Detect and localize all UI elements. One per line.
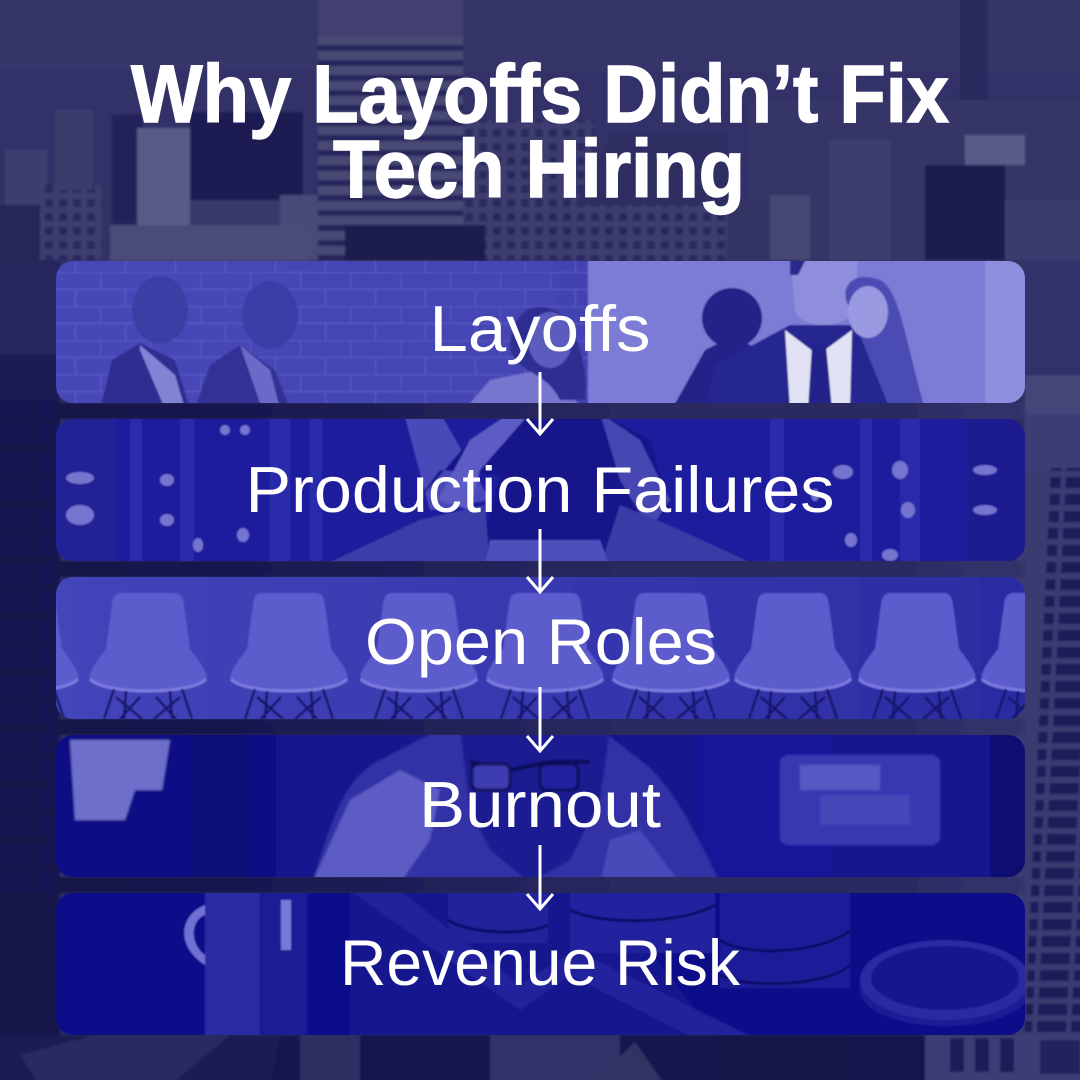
left dark building — [0, 260, 60, 365]
arrow: Layoffs to Production Failures — [527, 372, 553, 434]
arrow: Open Roles to Burnout — [527, 687, 553, 751]
label: Layoffs: Layoffs — [430, 292, 650, 365]
title: Tech Hiring — [333, 124, 745, 215]
arrow: Burnout to Revenue Risk — [527, 845, 553, 909]
title: Why Layoffs Didn’t Fix — [131, 49, 949, 140]
panel: Layoffs — [50, 255, 1033, 409]
panel: Production Failures — [50, 413, 1031, 567]
label: Revenue Risk: Revenue Risk — [340, 926, 740, 999]
title — [131, 49, 949, 215]
label: Open Roles: Open Roles — [365, 605, 717, 678]
label: Burnout: Burnout — [419, 768, 661, 841]
panel: Burnout — [50, 729, 1031, 883]
panel: Revenue Risk — [50, 887, 1031, 1041]
arrow: Production Failures to Open Roles — [527, 529, 553, 592]
panel: Open Roles — [56, 577, 1025, 719]
label: Production Failures: Production Failures — [246, 453, 834, 526]
